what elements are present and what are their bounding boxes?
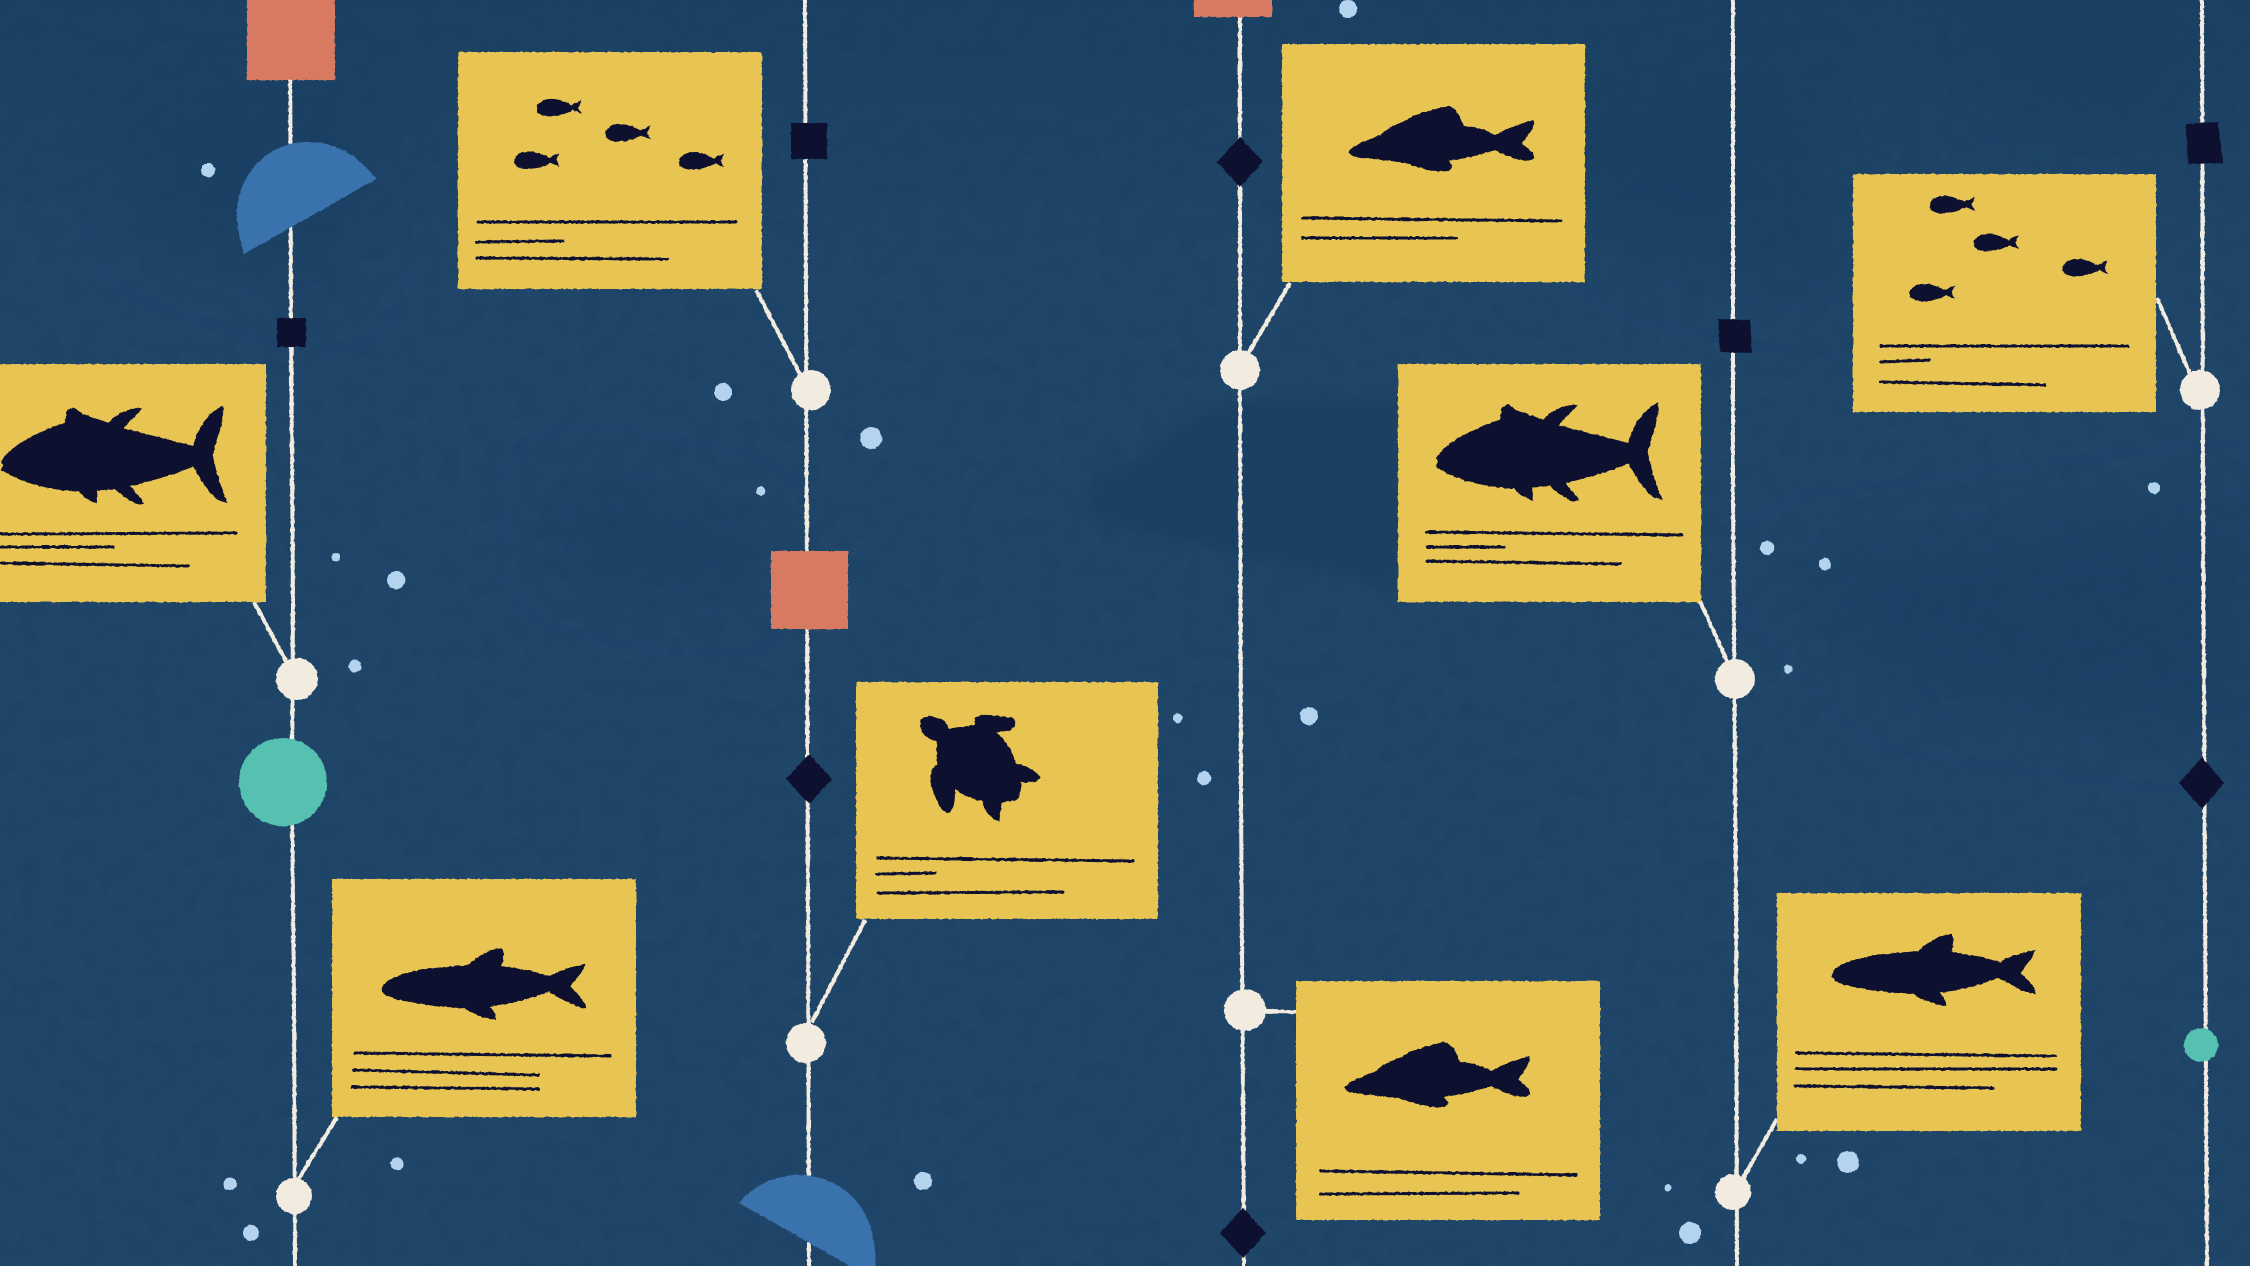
dark square xyxy=(2186,122,2223,164)
text lines xyxy=(877,858,1133,893)
salmon square xyxy=(247,0,335,80)
card: small fish school right xyxy=(1853,174,2156,412)
text lines xyxy=(1881,346,2128,385)
dark square xyxy=(277,318,306,347)
icon: small fish 3 xyxy=(2063,259,2108,276)
dark square xyxy=(791,123,827,159)
blue half disc xyxy=(237,142,376,254)
card: tuna center xyxy=(1398,364,1701,602)
icon: tuna xyxy=(1436,403,1663,502)
salmon square xyxy=(771,551,848,629)
icon: perch xyxy=(1345,1042,1530,1107)
dark diamond xyxy=(786,754,832,804)
node xyxy=(1715,1174,1751,1210)
cable 2 shapes xyxy=(739,123,876,1266)
card: shark right xyxy=(1777,893,2081,1131)
node xyxy=(1715,659,1755,699)
node xyxy=(786,1023,826,1063)
text lines xyxy=(1795,1053,2056,1088)
icon: small fish 4 xyxy=(679,152,724,170)
dark diamond xyxy=(1220,1208,1266,1258)
icon: small fish 2 xyxy=(605,124,651,142)
dark diamond xyxy=(2179,757,2224,809)
text lines xyxy=(0,533,236,566)
icon: tuna xyxy=(1,406,228,505)
cable 4 shapes xyxy=(1715,319,1755,1210)
text lines xyxy=(1303,218,1561,238)
card: small fish school top xyxy=(458,52,762,289)
card: perch top xyxy=(1282,44,1585,282)
text lines xyxy=(352,1053,610,1089)
icon: small fish 2 xyxy=(1974,234,2019,251)
teal circle xyxy=(2184,1028,2218,1062)
dark diamond xyxy=(1217,137,1263,187)
text lines xyxy=(1427,532,1682,564)
blue half disc xyxy=(739,1175,876,1266)
icon: small fish 3 xyxy=(514,152,560,169)
icon: shark xyxy=(382,948,586,1020)
node xyxy=(1220,350,1260,390)
card: sea turtle xyxy=(856,682,1158,919)
cable 1 shapes xyxy=(237,0,376,1214)
icon: small fish 4 xyxy=(1910,284,1955,301)
node xyxy=(276,658,318,700)
icon: sea turtle xyxy=(920,715,1041,822)
cable 5 shapes xyxy=(2179,122,2224,1062)
cable 3 shapes xyxy=(1194,0,1272,1258)
card: tuna left xyxy=(0,364,266,602)
node xyxy=(276,1178,312,1214)
salmon square xyxy=(1194,0,1272,17)
text lines xyxy=(476,222,736,259)
dark square xyxy=(1718,319,1752,353)
icon: shark xyxy=(1832,934,2036,1006)
card: shark left xyxy=(332,879,636,1117)
card: perch bottom xyxy=(1296,981,1600,1220)
icon: small fish 1 xyxy=(537,99,582,116)
icon: perch xyxy=(1349,106,1534,171)
teal circle xyxy=(239,738,327,826)
icon: small fish 1 xyxy=(1930,196,1975,213)
node xyxy=(2180,370,2220,410)
node xyxy=(1224,989,1266,1031)
text lines xyxy=(1320,1171,1576,1194)
node xyxy=(791,370,831,410)
